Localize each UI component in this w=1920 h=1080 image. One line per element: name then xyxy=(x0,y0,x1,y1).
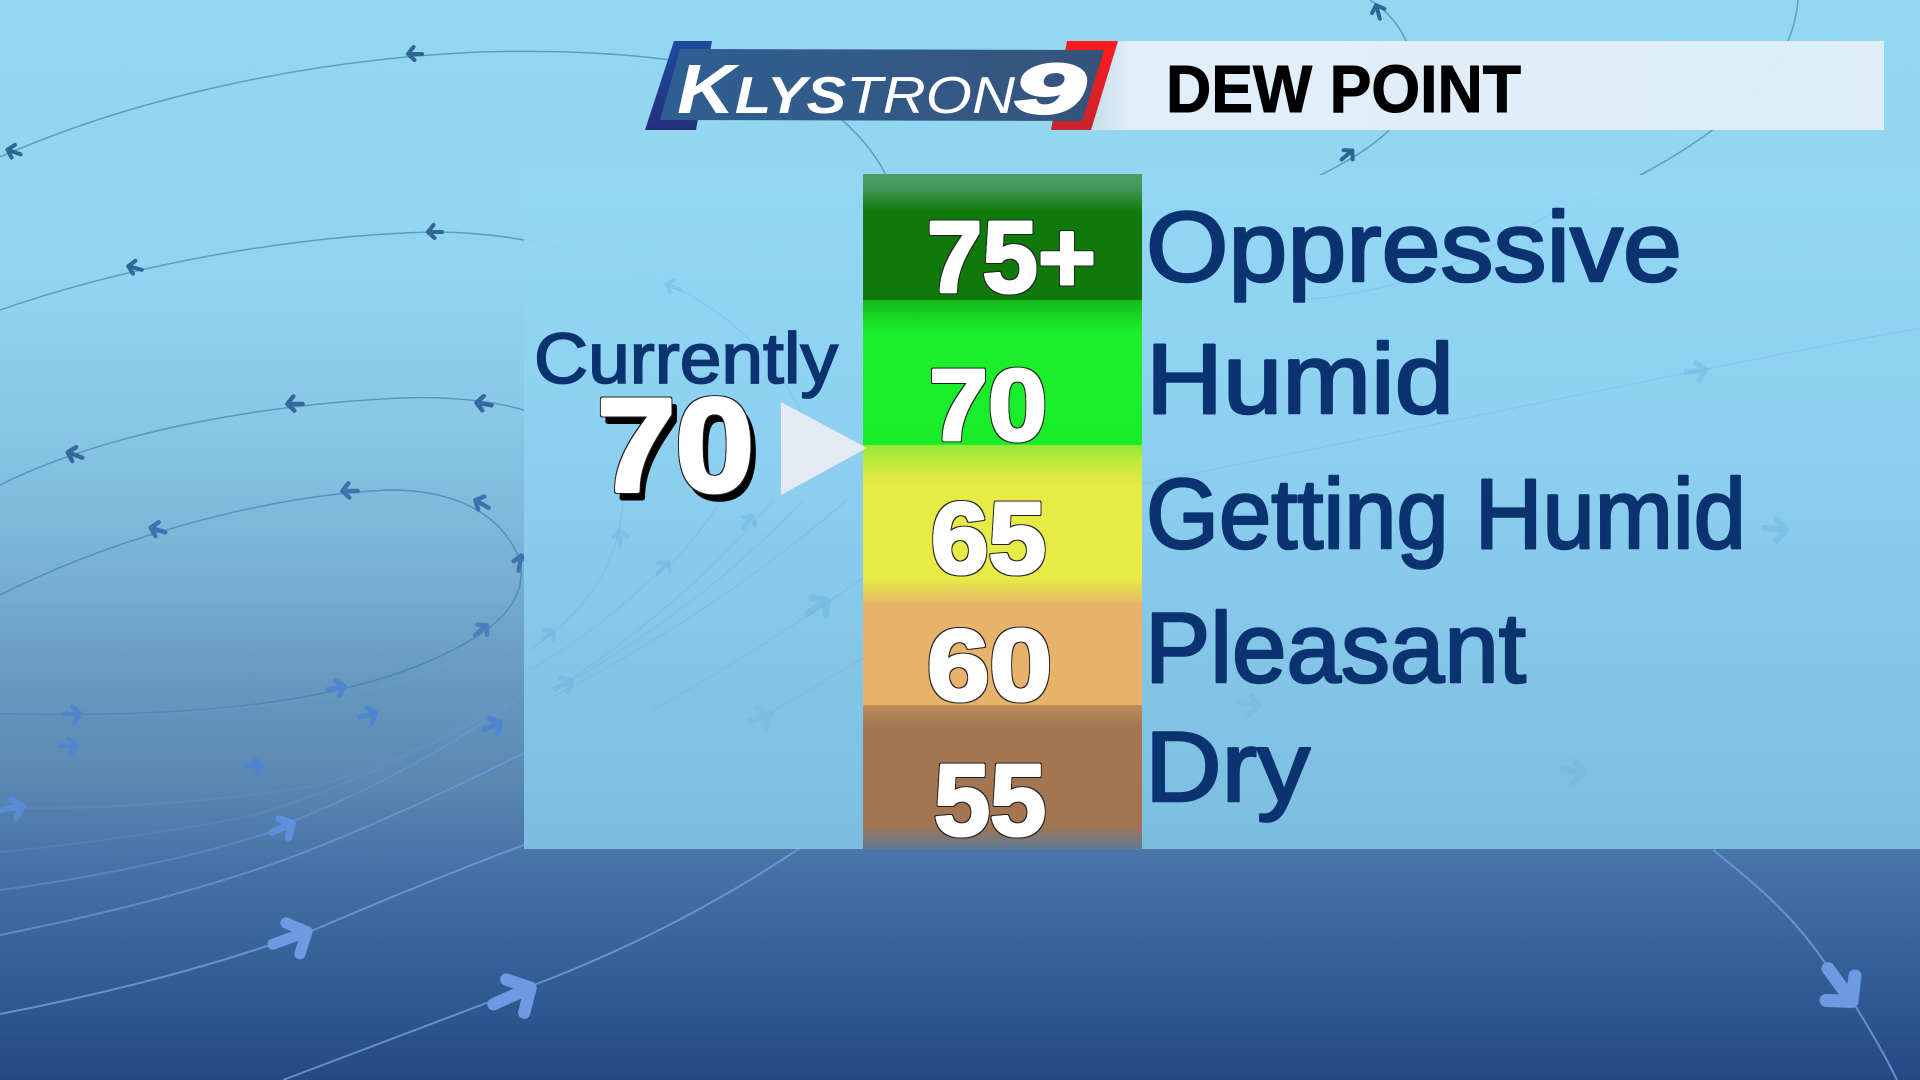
faint streamlines through panel xyxy=(530,208,1920,713)
band: 75+ oppressive xyxy=(863,174,1142,300)
heading: dew point: DEW POINT xyxy=(1166,52,1521,127)
label getting humid: Getting Humid xyxy=(1146,458,1746,569)
logo numeral: 9 xyxy=(1014,50,1085,128)
scale numbers xyxy=(927,202,1096,857)
label humid: Humid xyxy=(1146,323,1454,434)
current value 70 shadow: 70 xyxy=(602,379,759,527)
colour scale bar xyxy=(863,174,1142,850)
band: 65 getting humid xyxy=(863,445,1142,602)
title bar backing xyxy=(1091,41,1884,130)
value 55: 55 xyxy=(934,745,1046,857)
current value 70: 70 xyxy=(597,372,754,520)
value 75+: 75+ xyxy=(927,202,1096,314)
panel: scale backdrop xyxy=(524,175,1920,849)
pointer arrow xyxy=(781,402,867,495)
logo: Klystron 9 xyxy=(645,41,1118,130)
streamlines upper: dark arrows xyxy=(0,0,1798,715)
label oppressive: Oppressive xyxy=(1146,191,1682,302)
band: 70 humid xyxy=(863,300,1142,445)
category labels xyxy=(1145,191,1746,822)
value 70: 70 xyxy=(929,350,1047,462)
label dry: Dry xyxy=(1145,711,1311,822)
band: 60 pleasant xyxy=(863,602,1142,705)
value 60: 60 xyxy=(927,610,1052,722)
current reading xyxy=(534,320,867,527)
logo blue bracket xyxy=(645,41,712,130)
faint wind arrows through panel xyxy=(539,278,1787,784)
logo red bracket xyxy=(1051,41,1118,130)
label currently: Currently xyxy=(534,320,839,399)
streamlines lower: light blue xyxy=(0,620,1897,1080)
band: 55 dry xyxy=(863,705,1142,850)
value 65: 65 xyxy=(931,483,1046,595)
label pleasant: Pleasant xyxy=(1145,592,1526,703)
title bar xyxy=(1091,41,1884,130)
logo wordmark: KLYS TRON xyxy=(677,50,1015,128)
logo slab xyxy=(660,49,1104,121)
